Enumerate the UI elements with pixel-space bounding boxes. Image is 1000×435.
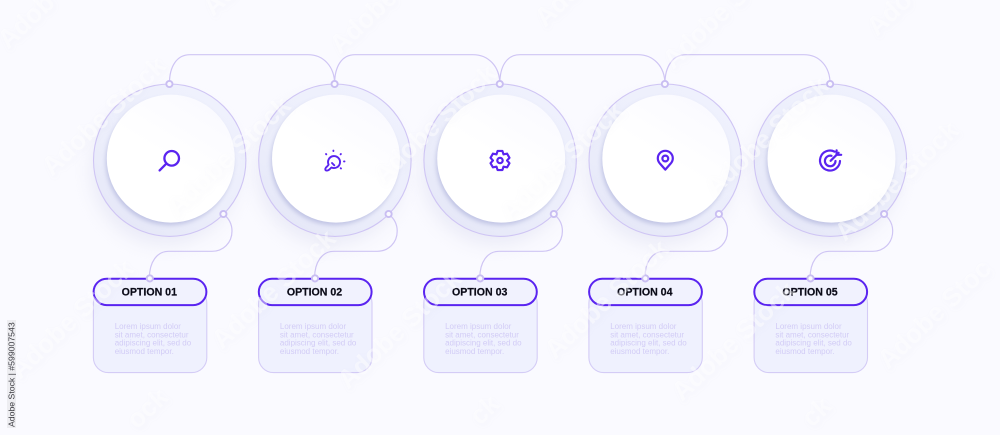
card text 2: Lorem ipsum dolor <box>280 322 346 331</box>
card 5 <box>754 279 868 373</box>
option pill 1 <box>94 279 206 305</box>
card text 2: adipiscing elit, sed do <box>280 339 357 348</box>
watermark pattern: Adobe Stock <box>493 95 630 226</box>
node lower 4 <box>716 211 722 217</box>
circle 4 <box>586 84 741 245</box>
option pill 3 <box>424 279 537 305</box>
connector 2 <box>315 214 397 278</box>
card text 4: adipiscing elit, sed do <box>610 339 687 348</box>
node top 3 <box>497 81 503 87</box>
card 3 <box>424 279 537 373</box>
card text 4: eiusmod tempor. <box>610 347 669 356</box>
card 1 <box>93 279 207 373</box>
icon: magnifying glass <box>160 151 179 170</box>
card text 5: adipiscing elit, sed do <box>775 339 852 348</box>
card text 5: eiusmod tempor. <box>775 347 835 356</box>
step 4 <box>586 81 741 373</box>
node top 2 <box>332 81 338 87</box>
watermark pattern: Adobe Stock <box>698 70 835 201</box>
connector 5 <box>810 214 893 278</box>
connector 1 <box>149 214 232 278</box>
card text 2: sit amet, consectetur <box>280 330 354 339</box>
card text 4: sit amet, consectetur <box>610 330 684 339</box>
node card 4 <box>642 275 648 282</box>
option title 4: OPTION 04 <box>617 287 673 299</box>
icon: map pin <box>658 151 673 170</box>
card body 3 <box>424 288 537 373</box>
watermark pattern: Adobe Stock <box>665 275 802 406</box>
card text 5: sit amet, consectetur <box>775 330 850 339</box>
option title 5: OPTION 05 <box>782 287 838 299</box>
node lower 2 <box>386 211 392 217</box>
card text 3: sit amet, consectetur <box>445 330 519 339</box>
watermark pattern: Adobe Stock <box>160 90 297 221</box>
top connector lines <box>169 55 830 84</box>
circle 1 <box>91 84 246 245</box>
node top 4 <box>662 81 668 87</box>
option pill 5 <box>754 279 867 305</box>
card text 3 <box>445 322 522 356</box>
node card 5 <box>807 275 814 282</box>
icon: light bulb <box>325 151 344 171</box>
card text 5 <box>775 322 852 356</box>
card text 4: Lorem ipsum dolor <box>610 322 677 331</box>
icon: target <box>820 150 841 171</box>
card 4 <box>589 279 702 373</box>
node top 1 <box>166 81 172 87</box>
card text 2 <box>280 322 357 356</box>
card text 1 <box>115 322 192 356</box>
option title 3: OPTION 03 <box>452 287 507 299</box>
option title 2: OPTION 02 <box>287 287 342 299</box>
option pill 4 <box>589 279 702 305</box>
card body 2 <box>259 288 372 373</box>
card text 4 <box>610 322 687 356</box>
card body 5 <box>754 288 868 373</box>
card text 1: adipiscing elit, sed do <box>115 339 192 348</box>
stock id caption: Adobe Stock | #599007543 <box>7 322 17 427</box>
watermark pattern: Adobe Stock <box>3 253 140 384</box>
step 5 <box>752 81 907 373</box>
card text 1: eiusmod tempor. <box>115 347 174 356</box>
node card 2 <box>312 275 318 282</box>
step 2 <box>256 81 411 373</box>
watermark pattern: Adobe Stock <box>366 58 503 189</box>
watermark pattern: Adobe Stock <box>828 115 965 246</box>
icon: gear <box>491 151 509 170</box>
option pill 2 <box>259 279 372 305</box>
circle 5 <box>752 84 907 245</box>
watermark pattern: ck <box>795 390 837 432</box>
node card 3 <box>477 275 483 282</box>
step 1 <box>91 81 246 373</box>
card text 5: Lorem ipsum dolor <box>775 322 842 331</box>
node card 1 <box>147 275 153 282</box>
node lower 3 <box>551 211 557 217</box>
connector 3 <box>480 214 562 278</box>
watermark pattern: ck <box>463 388 505 430</box>
node lower 5 <box>881 211 887 217</box>
step 3 <box>421 81 576 373</box>
card text 1: sit amet, consectetur <box>115 330 189 339</box>
watermark pattern: Adobe Stock <box>538 233 675 364</box>
watermark pattern: Adobe Stock <box>331 263 468 394</box>
circle 2 <box>256 84 411 245</box>
watermark pattern: Adobe Stock <box>35 50 172 181</box>
card text 1: Lorem ipsum dolor <box>115 322 181 331</box>
option title 1: OPTION 01 <box>122 287 177 299</box>
watermark pattern: Adobe Stoc <box>871 253 997 374</box>
node lower 1 <box>220 211 226 217</box>
circle 3 <box>421 84 576 245</box>
node top 5 <box>827 81 833 87</box>
watermark pattern: Adobe Stock <box>205 223 342 354</box>
watermark pattern: ock <box>120 381 174 434</box>
card 2 <box>259 279 372 373</box>
card body 4 <box>589 288 702 373</box>
card text 3: Lorem ipsum dolor <box>445 322 512 331</box>
card text 3: adipiscing elit, sed do <box>445 339 522 348</box>
connector 4 <box>645 214 728 278</box>
card body 1 <box>93 288 207 373</box>
card text 2: eiusmod tempor. <box>280 347 339 356</box>
card text 3: eiusmod tempor. <box>445 347 504 356</box>
